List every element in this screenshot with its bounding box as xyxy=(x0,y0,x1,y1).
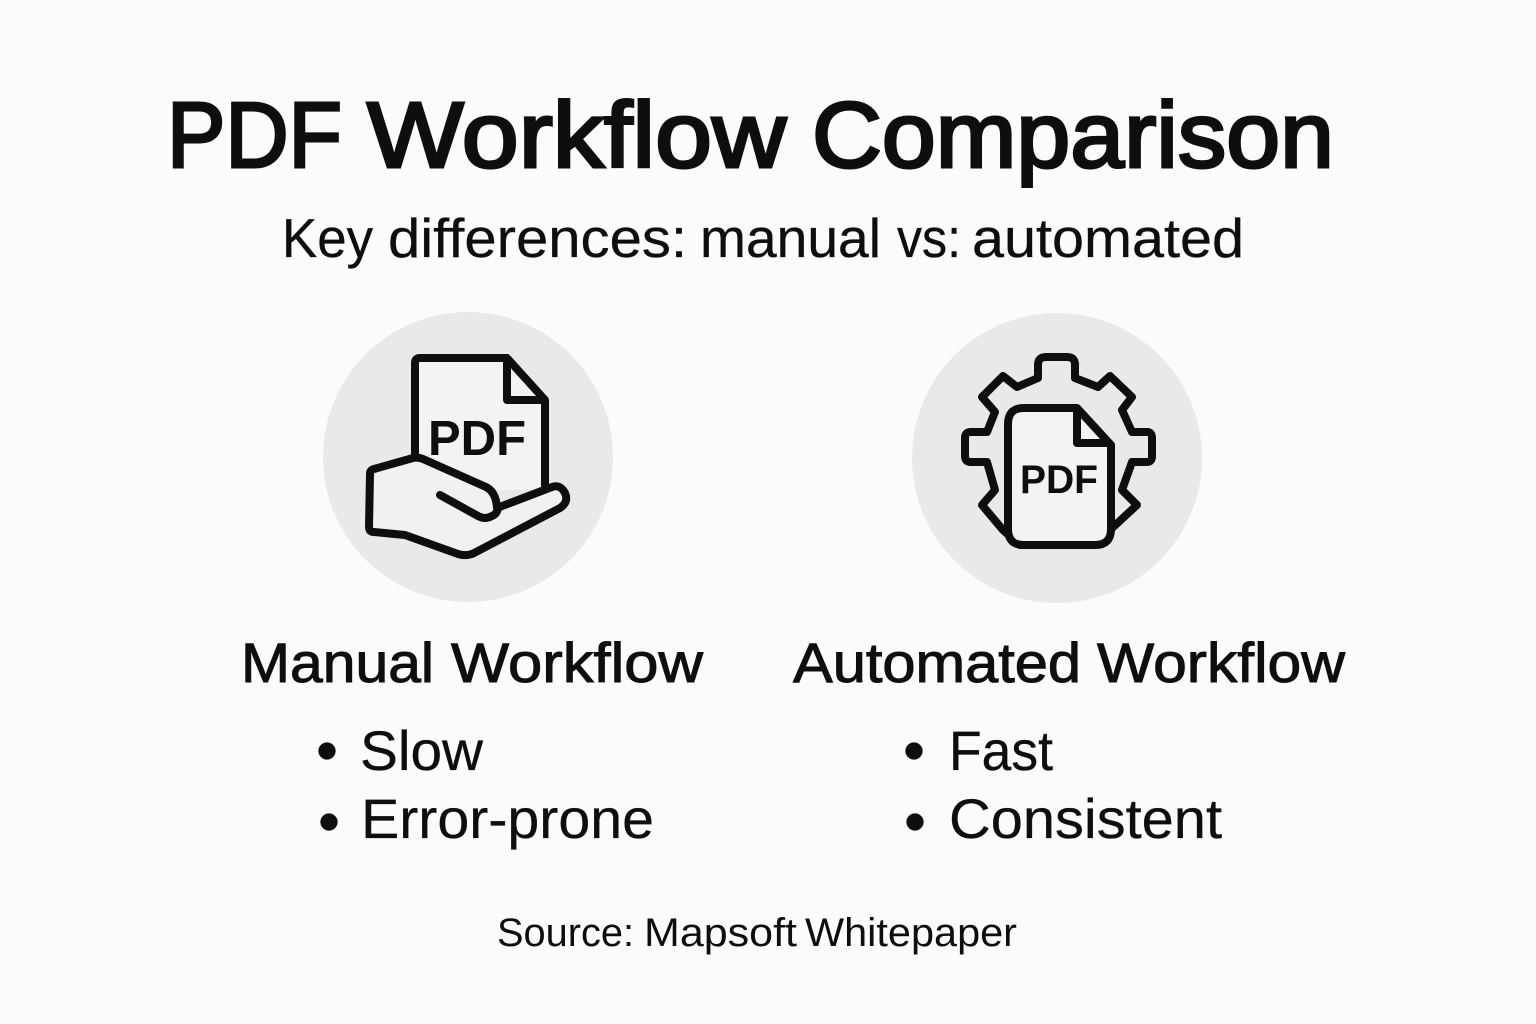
title xyxy=(167,83,1334,187)
title: PDF xyxy=(167,83,342,187)
heading: automated workflow: Workflow xyxy=(1097,631,1346,694)
list: automated workflow traits: Fast xyxy=(949,719,1053,782)
source note: Whitepaper xyxy=(805,911,1017,955)
icon: hand holding PDF document: PDF xyxy=(428,412,526,466)
icon: gear with PDF document: PDF xyxy=(1020,458,1098,502)
subtitle: Key xyxy=(282,207,373,269)
source note xyxy=(497,911,1017,955)
icon: gear with PDF document xyxy=(912,313,1202,603)
subtitle: manual xyxy=(700,207,881,269)
heading: manual workflow xyxy=(241,631,704,694)
icon: hand holding PDF document xyxy=(323,312,613,602)
panel: automated workflow xyxy=(793,313,1346,850)
heading: automated workflow xyxy=(793,631,1346,694)
list: manual workflow traits: Error-prone xyxy=(361,787,654,850)
list: manual workflow traits xyxy=(318,719,654,850)
list: manual workflow traits: Slow xyxy=(360,719,484,782)
source note: Source: xyxy=(497,911,634,955)
heading: automated workflow: Automated xyxy=(793,631,1081,694)
subtitle: vs: xyxy=(897,207,961,269)
list: automated workflow traits xyxy=(906,719,1222,850)
heading: manual workflow: Workflow xyxy=(451,631,704,694)
source note: Mapsoft xyxy=(644,911,797,955)
subtitle: differences: xyxy=(388,207,687,269)
title: Comparison xyxy=(812,83,1334,187)
list: automated workflow traits: Consistent xyxy=(949,787,1222,850)
subtitle xyxy=(282,207,1244,269)
panel: manual workflow xyxy=(241,312,704,850)
subtitle: automated xyxy=(972,207,1244,269)
heading: manual workflow: Manual xyxy=(241,631,434,694)
title: Workflow xyxy=(367,83,787,187)
